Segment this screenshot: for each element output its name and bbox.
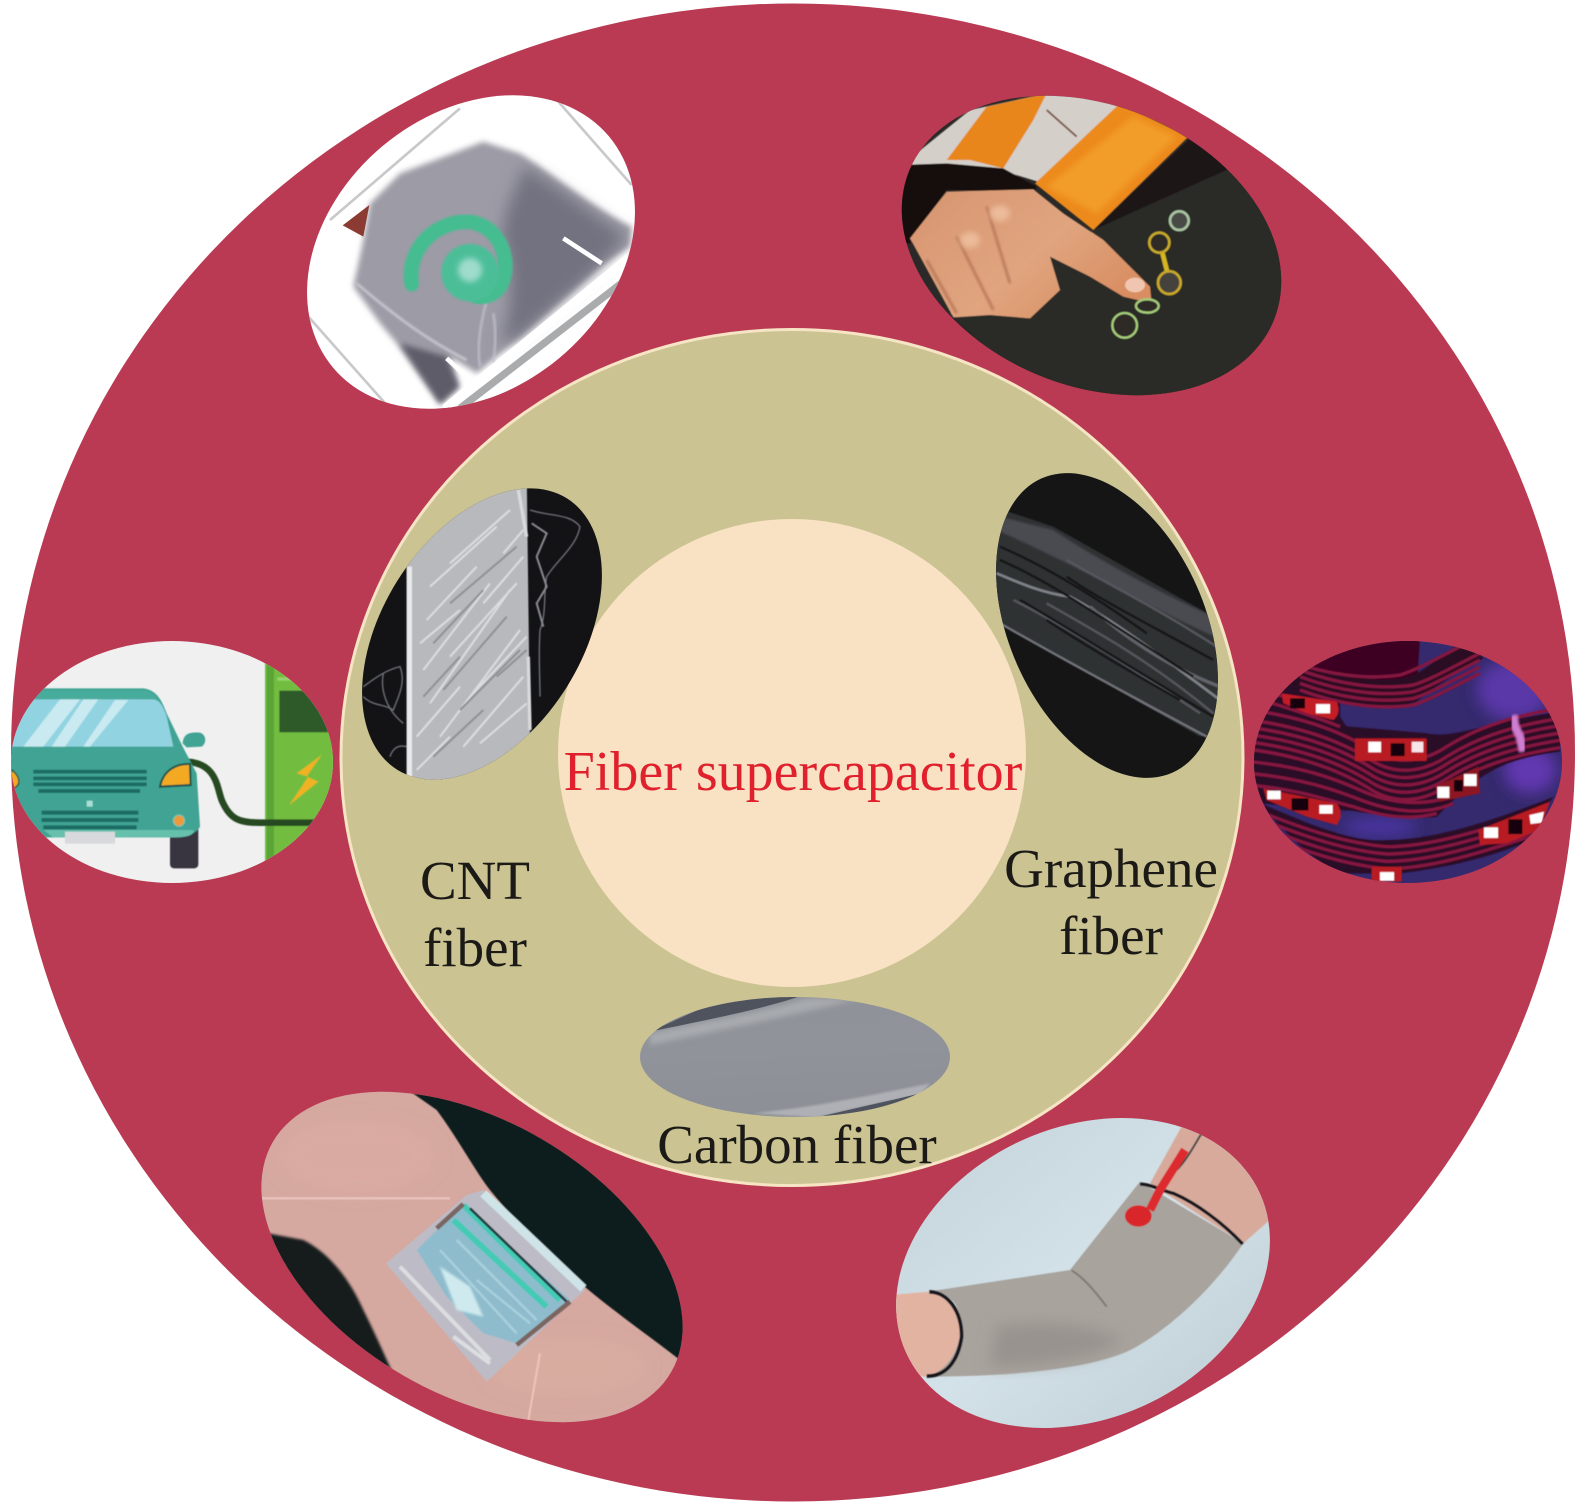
light streaks — [260, 1195, 450, 1202]
dark fabric bottom left — [250, 1230, 397, 1382]
label: Graphene fiber: fiber — [1059, 905, 1163, 966]
fiber strip — [407, 470, 530, 803]
lower light sheen — [753, 1083, 930, 1117]
hand — [910, 189, 1152, 318]
left dark wire ground — [1240, 663, 1440, 817]
lower arm skin — [890, 1292, 962, 1377]
green spiral — [411, 222, 505, 297]
label: CNT fiber: CNT — [420, 850, 530, 911]
shirt white — [912, 96, 1118, 182]
buttons — [1170, 211, 1189, 230]
charging cable — [187, 762, 320, 823]
shirt body — [353, 142, 632, 405]
label: Graphene fiber — [1004, 838, 1218, 966]
red electrode — [1150, 1150, 1185, 1210]
fiber micrograph: graphene — [980, 460, 1230, 790]
mirror — [183, 733, 205, 747]
car body — [7, 688, 200, 837]
bottom wire bundle — [1260, 797, 1553, 873]
headlights — [160, 764, 191, 787]
frame lines — [308, 102, 632, 405]
upper arm skin — [1150, 1123, 1283, 1243]
photo: flexible electronic skin patch — [250, 1080, 700, 1430]
label: CNT fiber: fiber — [423, 917, 527, 978]
photo: LED circuit textile — [1254, 641, 1562, 883]
photo: electric car charging — [11, 641, 333, 883]
fiber micrograph: carbon — [630, 990, 960, 1125]
jacket dark shoulder — [950, 137, 1290, 413]
pink glow on wires — [1513, 715, 1523, 752]
dark fabric top right — [403, 1080, 697, 1360]
grille — [33, 772, 147, 791]
middle tan ring: fiber materials — [341, 330, 1243, 1186]
purple glow — [1477, 660, 1550, 720]
photo: hand touching e-textile buttons — [902, 96, 1282, 396]
label: Graphene fiber: Graphene — [1004, 838, 1218, 899]
licence plate — [65, 832, 115, 844]
fiber strand — [993, 507, 1223, 737]
photo: smart shirt with green spiral — [307, 95, 635, 409]
lightning bolt — [289, 755, 322, 805]
tire — [170, 820, 198, 868]
upper dark wedge — [650, 995, 803, 1032]
orange vest — [947, 93, 1047, 168]
top wire bundle — [1273, 640, 1483, 707]
lower dark wedge — [820, 1093, 920, 1120]
patch substrate — [386, 1190, 585, 1382]
middle wire bundle — [1250, 712, 1560, 818]
center title: Fiber supercapacitor — [564, 741, 1023, 803]
inner cream circle — [558, 519, 1026, 987]
upper light sheen — [650, 998, 860, 1045]
photo: conductive elbow sleeve — [885, 1110, 1283, 1440]
top dark burgundy patch — [1307, 637, 1420, 693]
patch display — [417, 1204, 570, 1343]
collar sliver — [343, 205, 369, 237]
windshield — [10, 699, 173, 747]
skin shading — [277, 1120, 437, 1193]
label: CNT fiber — [420, 850, 530, 978]
LED modules — [1282, 693, 1339, 720]
charging station — [264, 663, 333, 861]
fiber micrograph: CNT — [350, 470, 620, 803]
black cuff — [897, 163, 1037, 243]
black hems — [927, 1292, 962, 1376]
label: Carbon fiber: Carbon fiber — [657, 1114, 937, 1175]
grey sleeve — [927, 1182, 1243, 1377]
stray nanotubes — [530, 510, 580, 697]
